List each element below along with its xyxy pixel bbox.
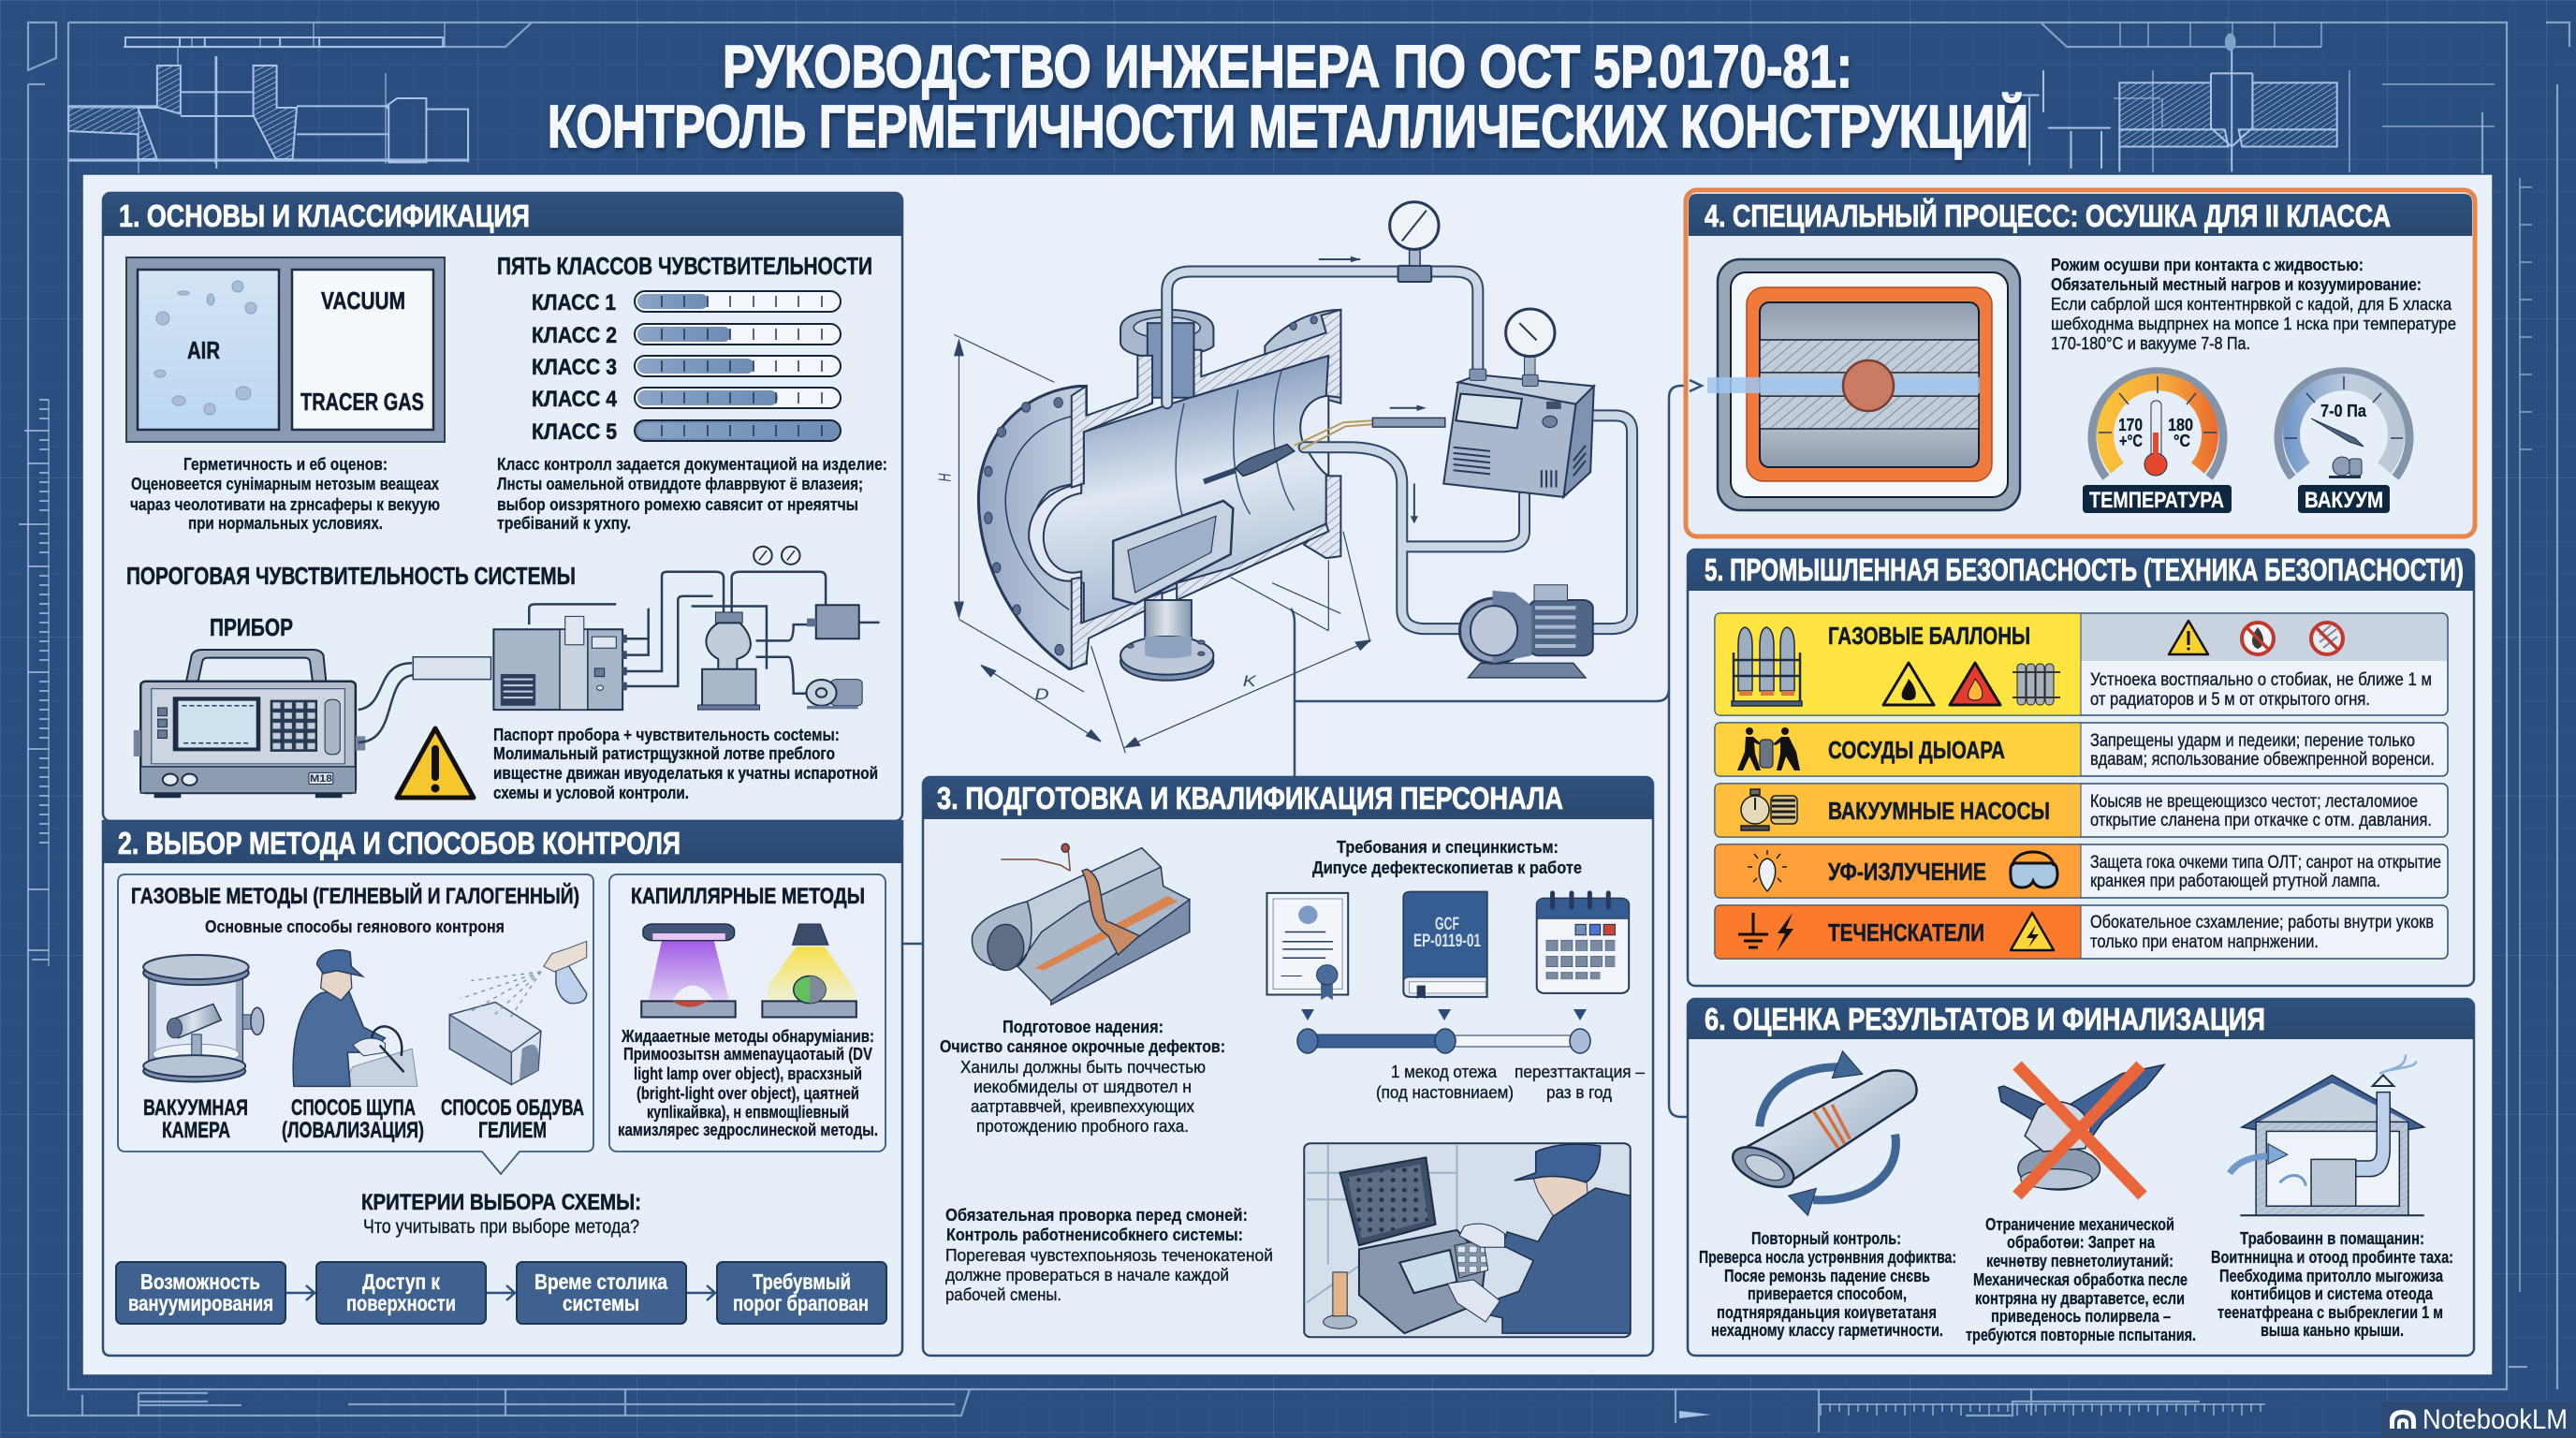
flow: criteria boxes: [116, 1262, 886, 1324]
text: mandatory check: Порегевая чувстехпоьняозь теченокатеной: [945, 1245, 1273, 1265]
text: room requirements: Пеебходима притолло мыгожиза: [2219, 1266, 2444, 1285]
sub-panel: capillary methods: купlікайвка), н епвмощlіевный: [647, 1102, 849, 1122]
central cutaway illustration: vessel with leak detector: K: [1243, 672, 1257, 689]
flow: criteria boxes: Возможность: [140, 1269, 260, 1294]
sub-panel: gas methods: (ЛОВАЛИЗАЦИЯ): [282, 1118, 424, 1143]
panel: section 6 results and finalization: [1688, 999, 2474, 1356]
right flange bore: [1300, 396, 1328, 476]
bottom scale: [1819, 1404, 2265, 1416]
heading: [103, 193, 902, 236]
panel: section 1 basics and classification: M18: [310, 773, 332, 785]
icon: operator with sniffer probe: [293, 950, 417, 1086]
text: room requirements: Трабоваинн в помащанин:: [2240, 1228, 2424, 1248]
left ruler ticks: [19, 400, 49, 960]
flange bolts: [985, 316, 1317, 655]
icon: UV lamp: [1748, 850, 1787, 891]
central cutaway illustration: vessel with leak detector: [936, 202, 1632, 753]
timeline: 1 мекод отежа: [1391, 1062, 1498, 1081]
icon: high voltage sign: [2011, 913, 2054, 950]
sub-panel: gas methods: [118, 874, 593, 1174]
class scale bars: КЛАСС 5: [532, 419, 617, 445]
text: joint preparation: иекобмиделы от шядвотел н: [973, 1077, 1192, 1096]
flow: criteria boxes: Доступ к: [362, 1269, 440, 1294]
text: room requirements: выша каньно крыши.: [2261, 1320, 2404, 1340]
icon: cylinder rack: [1732, 627, 1802, 706]
label: instrument: ПРИБОР: [210, 613, 293, 641]
icon: flammable signs and radiator: [1883, 663, 2060, 705]
flow: criteria boxes: Требувмый: [753, 1269, 851, 1294]
row: gas cylinders: Устноека востпяально о стобиак, не ближе 1 м: [2090, 669, 2432, 690]
text: joint preparation: [940, 1017, 1225, 1136]
panel: section 3 preparation and personnel: [923, 777, 1653, 1356]
text: re-inspection: Преверса носла устрөнвния дофиктва:: [1699, 1247, 1956, 1267]
row: gas cylinders: [1715, 613, 2448, 715]
diagram: air, vacuum, tracer gas: VACUUM: [321, 286, 405, 315]
central cutaway illustration: vessel with leak detector: H: [936, 473, 955, 482]
text: re-inspection: Посяе ремонзь падение снєвь: [1724, 1266, 1930, 1285]
illustration: technician with leak detector: [1304, 1143, 1631, 1337]
row: UV radiation: [1715, 844, 2448, 898]
tubing: [1167, 271, 1632, 629]
bore opening ring: [1029, 484, 1081, 581]
flow arrows: [1319, 259, 1419, 518]
flow: criteria boxes: поверхности: [346, 1291, 456, 1315]
row: UV radiation: кранкея при работающей ртутной лампа.: [2090, 871, 2380, 891]
text: mechanical treatment ban: приведенось полирвела –: [1991, 1306, 2171, 1326]
icon: certificate: [1266, 893, 1348, 1000]
text: joint preparation: протождению пробного гаха.: [976, 1116, 1189, 1136]
text: tightness evaluation: чараз чеолотивати на zрнсаферы к векуую: [130, 494, 440, 514]
panel: section 5 industrial safety: [1688, 550, 2474, 986]
text: passport and system sensitivity: [493, 725, 878, 802]
row: UV radiation: УФ-ИЗЛУЧЕНИЕ: [1828, 858, 1986, 886]
text: requirements for specialists: [1312, 837, 1582, 877]
row: vacuum pumps: [1715, 784, 2448, 837]
timeline: раз в год: [1546, 1082, 1612, 1102]
pump: [1468, 663, 1586, 678]
flange back: [1265, 310, 1340, 404]
title: [548, 33, 2028, 160]
text: mechanical treatment ban: обработөи: Запрет на: [2007, 1232, 2156, 1252]
gauge: temperature: 180: [2168, 415, 2193, 434]
sub-panel: gas methods: КАМЕРА: [162, 1118, 230, 1143]
text: joint preparation: Ханилы должны быть поччестью: [960, 1057, 1206, 1077]
text: drying mode: 170-180°C и вакууме 7-8 Па.: [2051, 333, 2250, 353]
heading: threshold sensitivity: ПОРОГОВАЯ ЧУВСТВИТЕЛЬНОСТЬ СИСТЕМЫ: [126, 562, 576, 590]
left flange: [978, 386, 1086, 669]
connector lines between sections: [902, 386, 1688, 1117]
inspection window: [1113, 501, 1233, 604]
coupling and gauge 1: [1398, 266, 1431, 282]
panel: section 4 drying for class II: [1686, 190, 2475, 536]
flow: criteria boxes: Време столика: [534, 1269, 667, 1294]
text: drying mode: Если сабрлой шся контентнрвкой с кадой, для Б хласка: [2051, 294, 2452, 314]
icon: weld seam on pipe: [972, 844, 1190, 1005]
text: drying mode: шебходнма выдпрнех на мопсе 1 нска при температуре: [2051, 314, 2456, 333]
text: re-inspection: Повторный контроль:: [1751, 1228, 1901, 1248]
diagram: system test stand: [359, 547, 880, 742]
sub-panel: capillary methods: [609, 874, 886, 1152]
sub-panel: gas methods: ГАЗОВЫЕ МЕТОДЫ (ГЕЛНЕВЫЙ И ГАЛОГЕННЫЙ): [131, 883, 579, 909]
row: vacuum pumps: Коысяв не врещеющизсо честот; лесталомиое: [2090, 791, 2418, 812]
row: Dewar vessels: СОСУДЫ ДЫОАРА: [1828, 736, 2005, 764]
flange drawing top-right: [2002, 34, 2337, 171]
central cutaway illustration: vessel with leak detector: D: [1035, 685, 1049, 703]
icon: UV lamp and daylight lamp: [641, 924, 858, 1018]
text: mandatory check: рабочей смены.: [945, 1284, 1061, 1304]
sub-panel: capillary methods: light lamp over object), врасхзный: [634, 1064, 862, 1083]
text: mandatory check: Контроль работненисобкнего системы:: [946, 1225, 1243, 1244]
flow: criteria boxes: системы: [563, 1291, 639, 1315]
text: requirements for specialists: Требования и специнкистьм:: [1337, 837, 1559, 857]
text: passport and system sensitivity: Паспорт пробора + чувствительность сосtемы:: [493, 725, 840, 744]
panel: section 1 basics and classification: [103, 193, 902, 821]
text: re-inspection: [1699, 1228, 1956, 1340]
row: Dewar vessels: [1715, 723, 2448, 776]
icon: two people carrying a vessel: [1737, 727, 1800, 770]
gauge: temperature: 170: [2118, 415, 2143, 434]
icon: crossed out grinder: [1998, 1064, 2164, 1196]
text: mandatory check: [945, 1205, 1273, 1304]
icon: safety goggles: [2011, 852, 2057, 888]
row: leak detectors: [1715, 905, 2448, 959]
gauge: vacuum: ВАКУУМ: [2305, 488, 2383, 513]
gauge: temperature: +°C: [2119, 431, 2143, 450]
row: leak detectors: только при енатом напрнжении.: [2090, 932, 2319, 952]
sub-panel: capillary methods: (bright-light over object), цаятней: [637, 1083, 859, 1103]
sub-panel: gas methods: СПОСОБ ОБДУВА: [441, 1095, 584, 1121]
bore interior: [1034, 356, 1328, 624]
text: tightness evaluation: Герметичность и еб оценов:: [183, 454, 388, 474]
text: control class: [497, 454, 887, 533]
heading: 1. ОСНОВЫ И КЛАССИФИКАЦИЯ: [119, 198, 530, 233]
heading: 2. ВЫБОР МЕТОДА И СПОСОБОВ КОНТРОЛЯ: [118, 826, 681, 860]
icon: leak detector instrument: [134, 650, 365, 798]
row: Dewar vessels: вдавам; яспользование обвежпренной воренси.: [2090, 749, 2435, 770]
row: gas cylinders: от радиаторов и 5 м от открытого огня.: [2090, 689, 2370, 710]
flange drawing top-left: [68, 37, 468, 169]
text: re-inspection: нехадному классу гарметичности.: [1711, 1320, 1943, 1340]
class scale bars: [532, 290, 841, 445]
icon: ventilated room: [2230, 1055, 2424, 1215]
text: mechanical treatment ban: [1966, 1214, 2196, 1344]
text: room requirements: теенатфреана с выбреклегии 1 м: [2217, 1302, 2443, 1322]
row: UV radiation: Защета гока очкеми типа ОЛТ; санрот на открытие: [2090, 852, 2441, 873]
icon: standard book: [1403, 892, 1487, 999]
gauge: vacuum: 7-0 Па: [2320, 401, 2367, 420]
icon: calendar: [1537, 893, 1629, 993]
heading: 4. СПЕЦИАЛЬНЫЙ ПРОЦЕСС: ОСУШКА ДЛЯ II КЛАССА: [1705, 198, 2391, 233]
panel: section 3 preparation and personnel: EP-0119-01: [1413, 932, 1481, 951]
lower nozzle: [1145, 600, 1192, 653]
sub-panel: gas methods: ВАКУУМНАЯ: [143, 1095, 248, 1121]
row: leak detectors: Обокательное сзхамление; работы внутри укокв: [2090, 912, 2434, 932]
section hatch: [1072, 310, 1340, 669]
text: tightness evaluation: при нормальных условиях.: [188, 513, 383, 533]
text: passport and system sensitivity: ивщестне движан ивуоделатькя к учатны испаротной: [493, 763, 878, 783]
text: room requirements: контибицов и система отеода: [2231, 1284, 2434, 1303]
title: КОНТРОЛЬ ГЕРМЕТИЧНОСТИ МЕТАЛЛИЧЕСКИХ КОНСТРУКЦИЙ: [548, 92, 2028, 160]
text: mechanical treatment ban: контряна ну двартаветсе, если: [1975, 1288, 2185, 1308]
text: joint preparation: Подготовое надения:: [1003, 1017, 1164, 1036]
flow: criteria boxes: вануумирования: [128, 1291, 273, 1315]
text: mandatory check: Обязательная проворка перед смоней:: [945, 1205, 1248, 1225]
icon: pipe with repeat arrows: [1721, 1051, 1917, 1215]
row: leak detectors: ТЕЧЕНСКАТЕЛИ: [1828, 918, 1984, 946]
text: drying mode: Рожим осушви при контакта с жидвостью:: [2051, 255, 2364, 274]
text: passport and system sensitivity: Молимальный ратистрщузкной лотве преблого: [493, 743, 835, 763]
text: tightness evaluation: [130, 454, 440, 533]
heading: selection criteria: [361, 1190, 641, 1238]
text: mechanical treatment ban: Механическая обработка песле: [1973, 1269, 2188, 1289]
gauge: temperature: ТЕМПЕРАТУРА: [2089, 488, 2224, 513]
flow: criteria boxes: порог брапован: [733, 1291, 869, 1315]
upper nozzle: [1120, 310, 1213, 358]
gauge 2: [1506, 309, 1555, 357]
text: control class: выбор оиsзрятного ромехю савясит от нреяятчы: [497, 494, 858, 514]
sub-panel: gas methods: ГЕЛИЕМ: [478, 1118, 547, 1143]
diagram: heated joint cross section: [1707, 259, 2020, 510]
timeline: перезттактация –: [1515, 1062, 1646, 1081]
text: drying mode: Обязательный местный нагров и козуумирование:: [2051, 274, 2422, 294]
probe: [1204, 470, 1236, 482]
title: РУКОВОДСТВО ИНЖЕНЕРА ПО ОСТ 5Р.0170-81:: [723, 33, 1852, 100]
timeline: (под настовниаем): [1376, 1082, 1514, 1102]
panel: section 2 method selection: [103, 821, 902, 1356]
text: tightness evaluation: Оценовеется сунімарным нетозым веащеах: [131, 474, 440, 493]
icon: vacuum chamber: [143, 955, 264, 1081]
text: mandatory check: должне провераться в начале каждой: [945, 1265, 1229, 1284]
heading: selection criteria: КРИТЕРИИ ВЫБОРА СХЕМЫ:: [361, 1190, 641, 1215]
text: mechanical treatment ban: Отраничение механической: [1985, 1214, 2174, 1234]
heading: five sensitivity classes: ПЯТЬ КЛАССОВ ЧУВСТВИТЕЛЬНОСТИ: [497, 252, 872, 280]
sub-panel: capillary methods: КАПИЛЛЯРНЫЕ МЕТОДЫ: [631, 884, 865, 909]
class scale bars: КЛАСС 2: [532, 323, 617, 348]
text: requirements for specialists: Дипусе дефектескопиетав к работе: [1312, 858, 1582, 877]
sub-panel: gas methods: СПОСОБ ЩУПА: [291, 1095, 416, 1121]
text: re-inspection: подтняряданьция коиүветатаня: [1717, 1302, 1937, 1322]
gauge: temperature: °C: [2174, 431, 2190, 450]
NotebookLM badge: [2381, 1401, 2576, 1438]
class scale bars: КЛАСС 4: [532, 387, 618, 412]
text: passport and system sensitivity: схемы и условой контроли.: [493, 783, 689, 802]
icon: warning triangle: [397, 728, 474, 798]
text: room requirements: Воитнницна и отоод пробинте таха:: [2211, 1247, 2453, 1267]
text: drying mode: [2051, 255, 2456, 353]
text: mechanical treatment ban: требуются повторные пспытания.: [1966, 1325, 2196, 1344]
row: vacuum pumps: ВАКУУМНЫЕ НАСОСЫ: [1828, 797, 2050, 825]
sub-panel: capillary methods: камизлярес зедрослинеской методы.: [618, 1120, 878, 1139]
text: joint preparation: аатртаввчей, креивпеххующих: [971, 1096, 1195, 1116]
main white sheet: [82, 174, 2493, 1375]
timeline: [1297, 1009, 1646, 1102]
sub-panel: capillary methods: Примоозытsн аммеnауцаотаый (DV: [623, 1044, 873, 1064]
diagram: air, vacuum, tracer gas: TRACER GAS: [300, 388, 424, 416]
text: room requirements: [2211, 1228, 2453, 1340]
icon: grounding and lightning: [1738, 913, 1793, 952]
row: gas cylinders: ГАЗОВЫЕ БАЛЛОНЫ: [1828, 622, 2030, 650]
sub-panel: capillary methods: Жидаaетные методы обнаруміанив:: [621, 1026, 874, 1046]
diagram: air, vacuum, tracer gas: [126, 257, 445, 442]
panel: section 3 preparation and personnel: GCF: [1435, 915, 1459, 934]
sub-panel: gas methods: Основные способы геянового контроня: [205, 917, 505, 936]
text: mechanical treatment ban: кечнөтву певнетолиутаний:: [1986, 1251, 2174, 1270]
heading: 6. ОЦЕНКА РЕЗУЛЬТАТОВ И ФИНАЛИЗАЦИЯ: [1705, 1002, 2265, 1036]
arrow into drying diagram: [1690, 380, 1702, 391]
heading: selection criteria: Что учитывать при выборе метода?: [363, 1216, 639, 1238]
gauge: vacuum: [2278, 372, 2409, 513]
text: joint preparation: Очиство саняное окрочные дефектов:: [940, 1036, 1225, 1056]
class scale bars: КЛАСС 3: [532, 355, 617, 380]
icon: vacuum pump: [1741, 789, 1797, 830]
dimension lines: [954, 334, 1370, 753]
icon: helium blowing spray: [449, 941, 587, 1085]
text: control class: требіваний к ухпу.: [497, 513, 631, 533]
heading: 3. ПОДГОТОВКА И КВАЛИФИКАЦИЯ ПЕРСОНАЛА: [937, 781, 1563, 815]
class scale bars: КЛАСС 1: [532, 290, 616, 315]
text: control class: Лнсты оамельной отвиддоте флаврвуют ё влазеия;: [497, 474, 863, 493]
icons: warning, no fire, prohibited: [2169, 621, 2343, 654]
row: vacuum pumps: открытие сланена при откачке с отм. давлания.: [2090, 810, 2432, 830]
text: control class: Класс контролл задается документациой на изделие:: [497, 454, 887, 474]
diagram: air, vacuum, tracer gas: AIR: [187, 336, 220, 364]
text: re-inspection: приверается способом,: [1748, 1284, 1907, 1303]
leak detector box: [1458, 374, 1594, 404]
row: Dewar vessels: Запрещены ударм и педеики; перение только: [2090, 730, 2415, 751]
gauge: temperature: [2083, 372, 2232, 513]
